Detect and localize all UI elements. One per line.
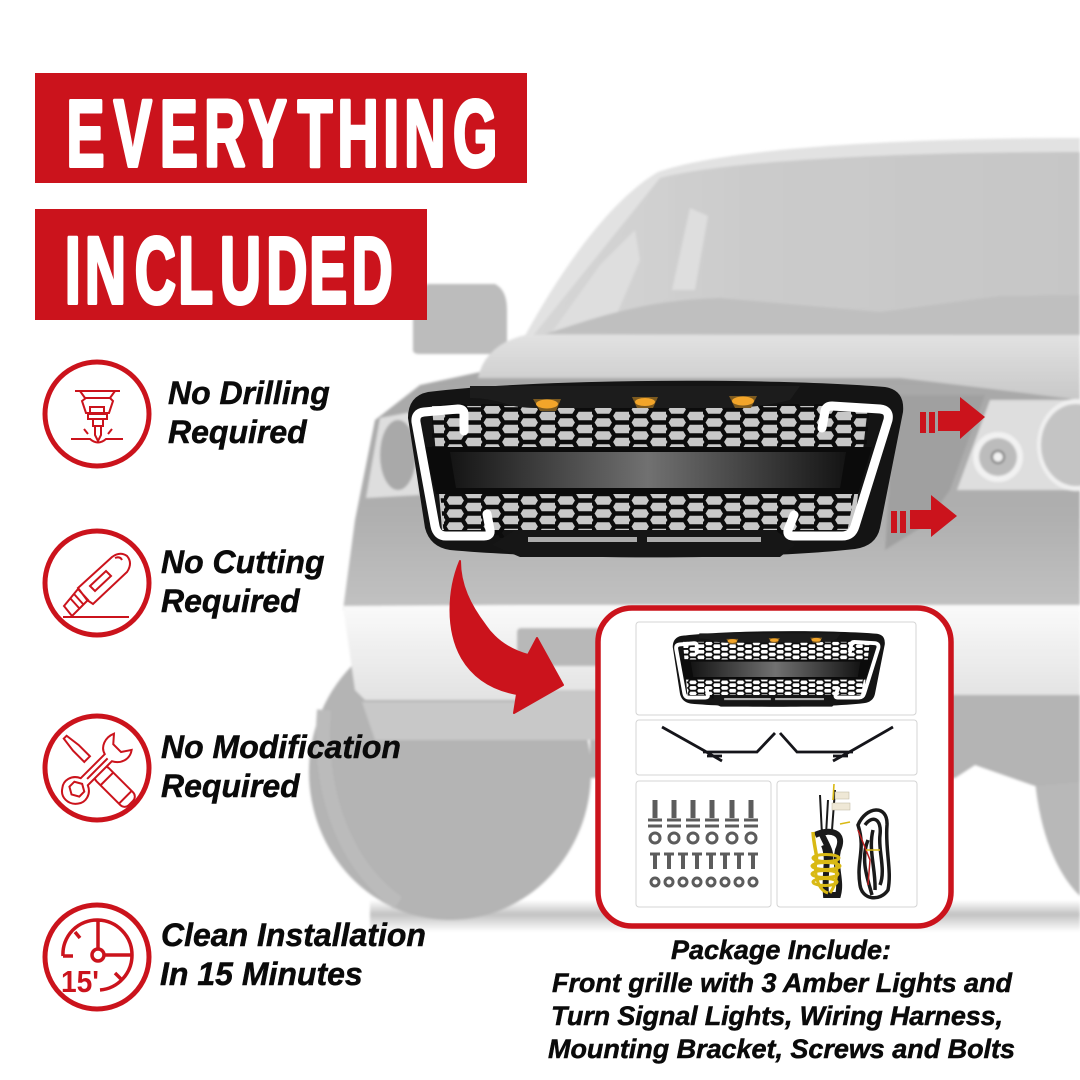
windshield <box>532 152 1080 340</box>
feature: clean installation <box>45 905 426 1009</box>
bumper cutout <box>517 628 602 666</box>
sub panel: wiring harness <box>777 781 917 907</box>
fog lamp lens <box>973 432 1023 482</box>
left DRL <box>416 409 490 536</box>
icon: 15 minute clock <box>45 905 149 1009</box>
lower valance <box>365 695 1080 786</box>
arrow: curved to package <box>450 561 563 713</box>
amber light 1 <box>533 399 561 411</box>
centre band <box>424 447 872 494</box>
sub panel: screws and bolts <box>636 781 771 907</box>
arrow: lower right <box>891 495 957 537</box>
sub panel: mounting brackets <box>636 720 917 775</box>
wipers <box>545 295 1080 335</box>
amber light 2 <box>632 397 658 408</box>
icon: 15 minute clock: 15' <box>61 964 99 999</box>
icon: drill <box>45 362 149 466</box>
heading: included: INCLUDED <box>65 217 393 324</box>
feature: no cutting <box>45 531 324 635</box>
grille backing <box>430 405 868 540</box>
package caption: Turn Signal Lights, Wiring Harness, <box>551 1001 1003 1031</box>
right tire <box>1035 780 1080 896</box>
bumper <box>343 605 1080 700</box>
headlight lens inner <box>1041 404 1080 486</box>
background truck <box>309 138 1080 932</box>
slot left <box>528 537 637 542</box>
truck body <box>343 372 1080 610</box>
text: no drilling: No Drilling <box>168 375 330 411</box>
upper mesh <box>432 404 870 452</box>
text: clean installation: In 15 Minutes <box>160 956 363 992</box>
package caption: Package Include: <box>671 935 891 965</box>
text: clean installation: Clean Installation <box>161 917 426 953</box>
text: no cutting: No Cutting <box>161 544 324 580</box>
left headlight <box>366 412 420 498</box>
package caption <box>548 935 1015 1064</box>
windshield reflections <box>552 208 708 332</box>
amber light 3 <box>729 396 757 408</box>
heading: everything: EVERYTHING <box>66 80 497 187</box>
grille frame <box>408 381 903 557</box>
text: no drilling: Required <box>168 414 308 450</box>
side grille texture <box>885 395 985 550</box>
headlight lens <box>1037 399 1080 491</box>
package caption: Front grille with 3 Amber Lights and <box>552 968 1012 998</box>
hood <box>478 335 1080 400</box>
tire tread <box>323 710 398 903</box>
left headlight lens <box>380 420 416 490</box>
icon: wrench and screwdriver <box>45 716 149 820</box>
left tire <box>309 624 591 920</box>
slot right <box>647 537 761 542</box>
text: no modification: No Modification <box>161 729 401 765</box>
amber light housing <box>470 386 800 408</box>
bumper shade <box>362 690 600 740</box>
fog lamp bulb <box>992 451 1004 463</box>
right DRL <box>788 406 888 536</box>
package caption: Mounting Bracket, Screws and Bolts <box>548 1034 1015 1064</box>
fog lamp centre <box>979 438 1017 476</box>
right headlight <box>957 400 1080 490</box>
arrow: upper right <box>920 397 985 439</box>
centre band highlight <box>450 452 846 488</box>
lower mesh <box>440 490 855 538</box>
feature: no drilling <box>45 362 330 466</box>
side mirror <box>413 284 507 354</box>
lower intake <box>492 530 795 557</box>
panel: package contents <box>598 608 951 926</box>
feature: no modification <box>45 716 401 820</box>
grille <box>408 381 903 557</box>
icon: utility knife <box>45 531 149 635</box>
ground shadow <box>370 900 1080 932</box>
text: no modification: Required <box>161 768 301 804</box>
text: no cutting: Required <box>161 583 301 619</box>
roof <box>520 138 1080 345</box>
sub panel: grille <box>636 622 916 715</box>
